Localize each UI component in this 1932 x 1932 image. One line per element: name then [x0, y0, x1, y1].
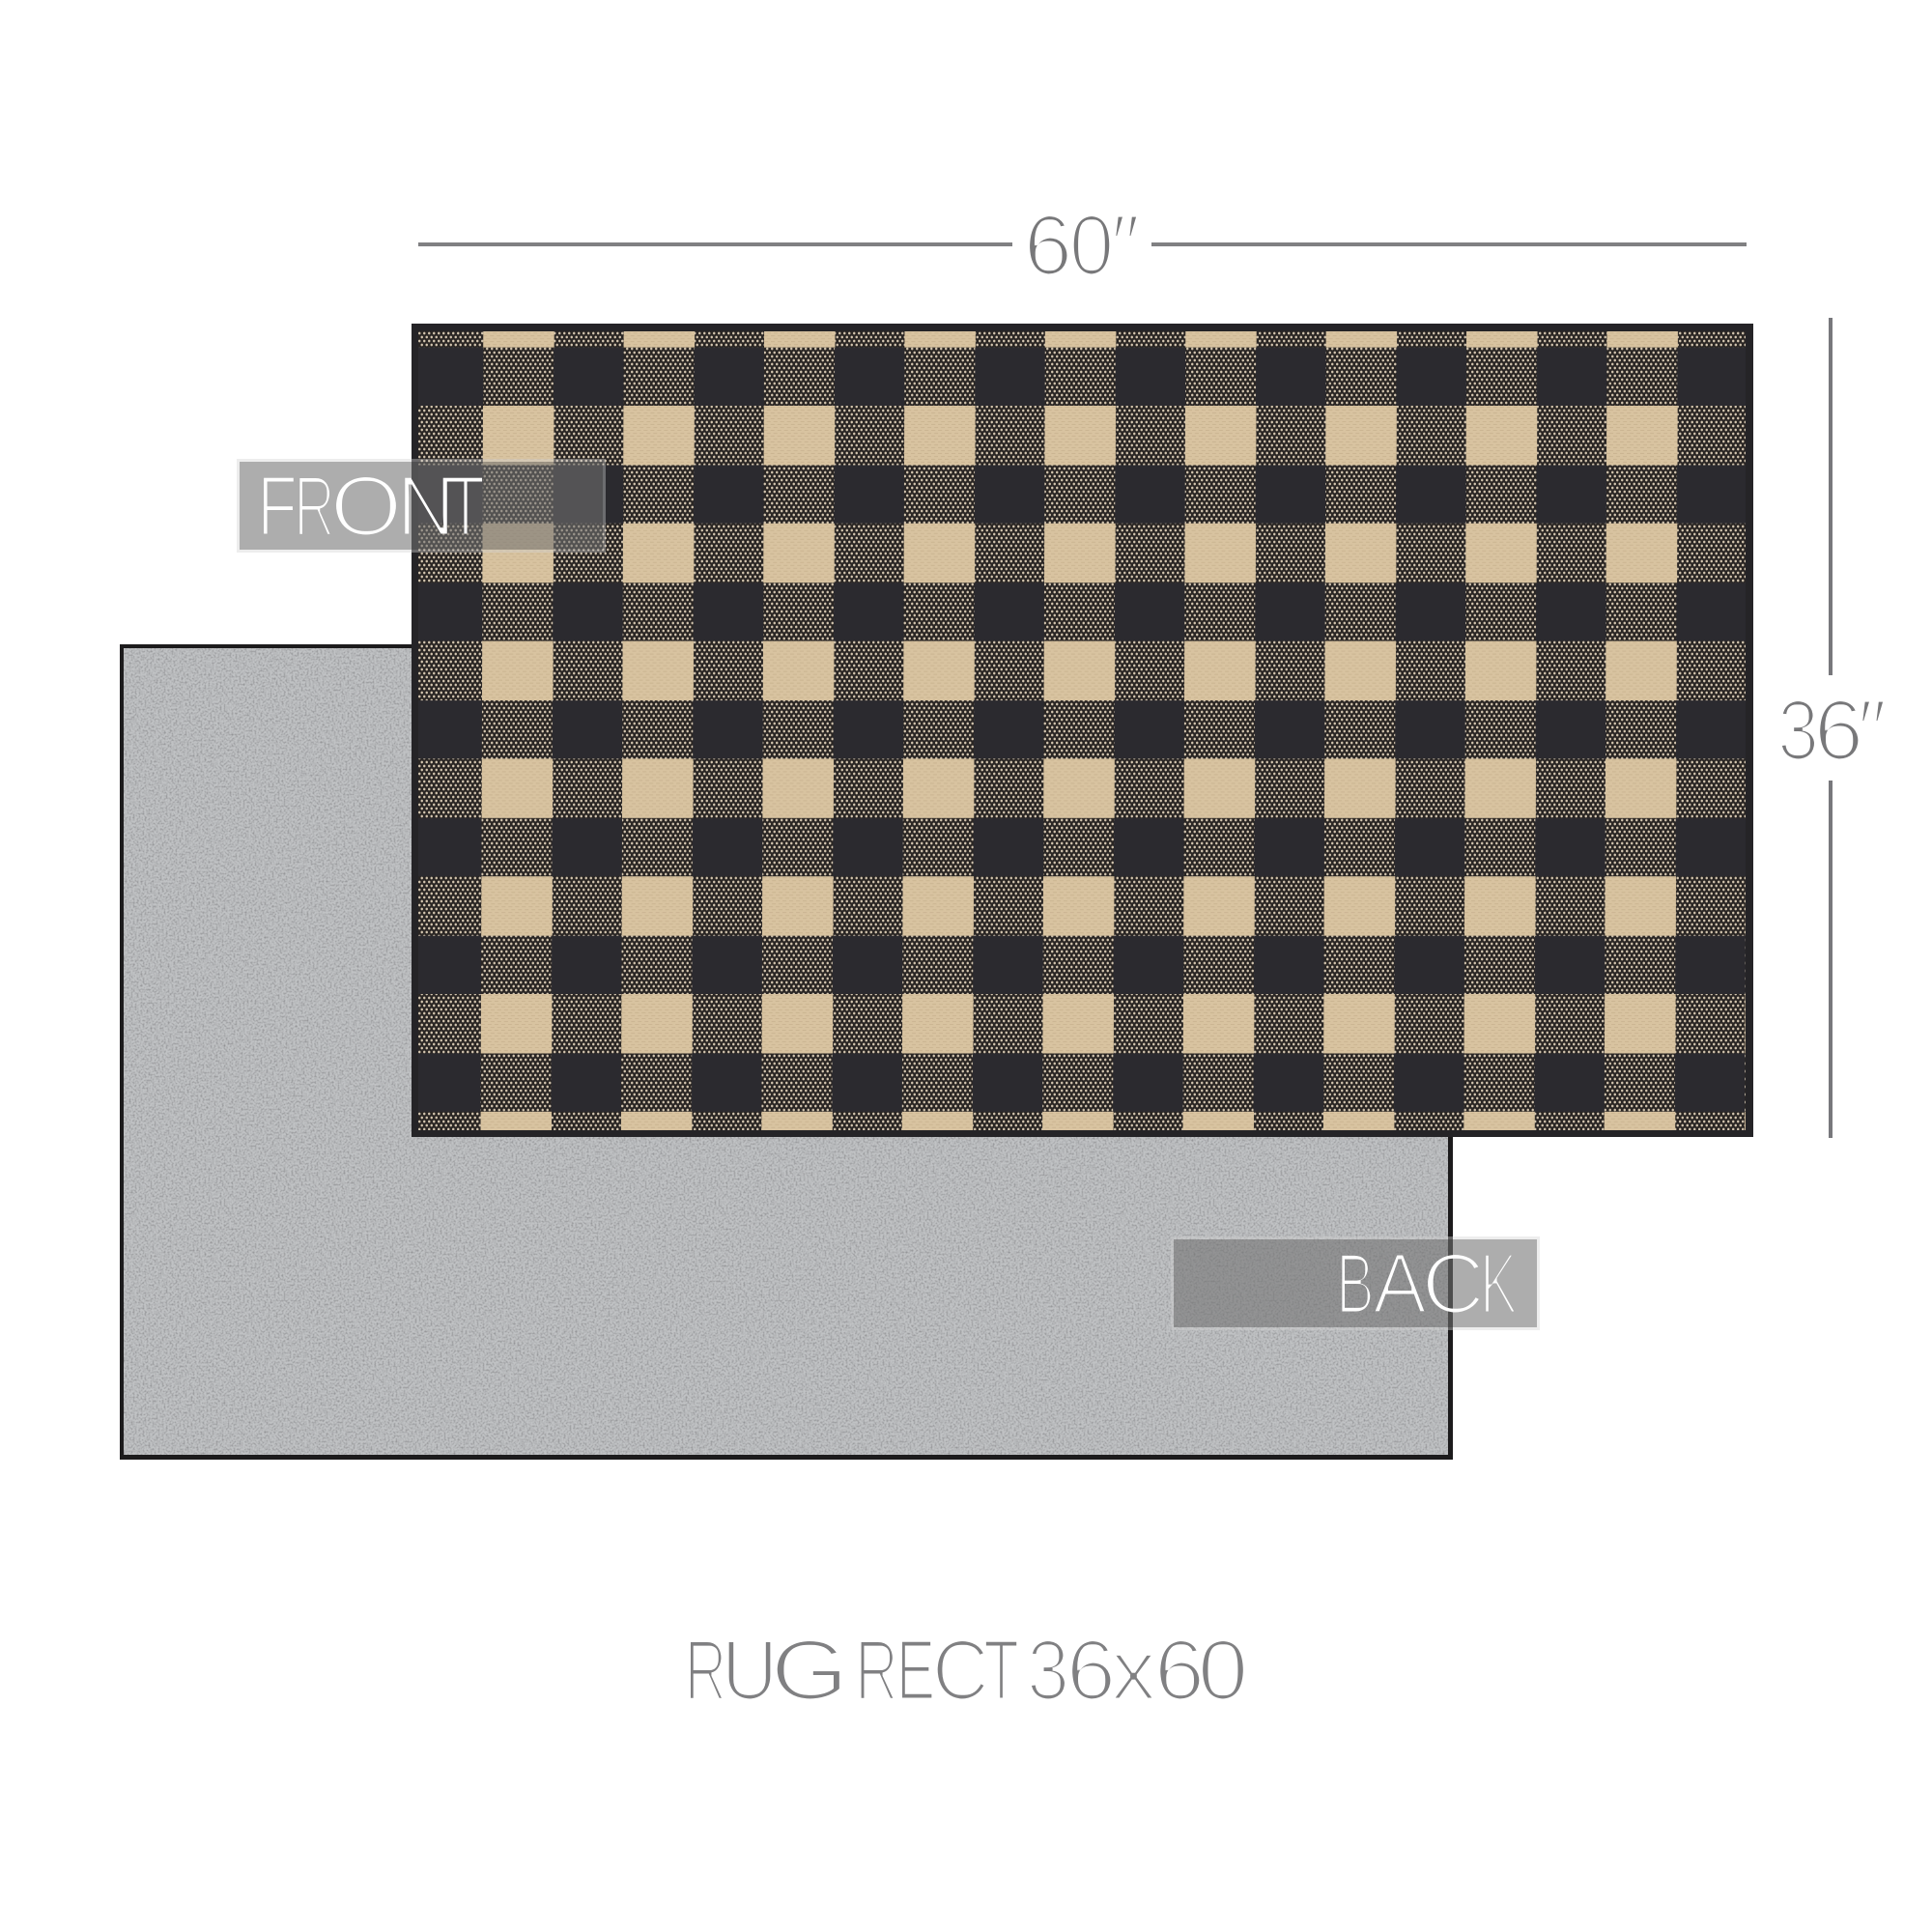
front label text: N	[397, 458, 455, 554]
front rug woven dither cells	[418, 331, 1746, 1130]
height dimension label: ″	[1858, 682, 1887, 778]
front label text: T	[446, 458, 485, 554]
front label outline	[238, 460, 605, 551]
back label text: A	[1373, 1236, 1427, 1331]
back label outline	[1173, 1238, 1538, 1329]
back label text: K	[1480, 1236, 1518, 1331]
title: product name: 6	[1154, 1622, 1205, 1718]
title: product name: C	[932, 1622, 989, 1718]
back rug grey surface	[124, 648, 1448, 1455]
title: product name: T	[983, 1622, 1018, 1718]
panel: back of rug	[120, 644, 1453, 1460]
front rug binding edge	[412, 324, 1753, 1137]
width dimension right line	[1151, 242, 1747, 246]
callout: front label	[238, 458, 605, 554]
back label text: B	[1336, 1236, 1375, 1331]
height dimension label: 3	[1777, 682, 1819, 778]
back rug woven texture	[124, 648, 1448, 1455]
width dimension label: 6	[1024, 197, 1072, 293]
back label box	[1174, 1239, 1537, 1327]
width dimension label: 0	[1069, 197, 1114, 293]
front rug buffalo check squares	[418, 331, 1746, 1130]
title: product name: G	[771, 1622, 848, 1718]
title: product name: x	[1111, 1622, 1156, 1718]
title: product name: U	[722, 1622, 778, 1718]
front label box	[240, 462, 603, 550]
front label text: O	[330, 458, 402, 554]
height dimension label: 6	[1814, 682, 1863, 778]
width dimension left line	[418, 242, 1012, 246]
back rug binding edge	[120, 644, 1453, 1460]
callout: back label	[1173, 1236, 1538, 1331]
title: product name: 6	[1066, 1622, 1116, 1718]
title: product name: 3	[1027, 1622, 1069, 1718]
height dimension lower line	[1829, 781, 1833, 1138]
width dimension label: ″	[1111, 197, 1140, 293]
title: product name: R	[684, 1622, 726, 1718]
panel: front of rug	[412, 324, 1753, 1137]
title: product name: 0	[1198, 1622, 1248, 1718]
front label text: F	[257, 458, 298, 554]
height dimension upper line	[1829, 318, 1833, 675]
back label text: C	[1422, 1236, 1485, 1331]
title: product name: E	[896, 1622, 935, 1718]
front label text: R	[294, 458, 335, 554]
title: product name: R	[855, 1622, 898, 1718]
